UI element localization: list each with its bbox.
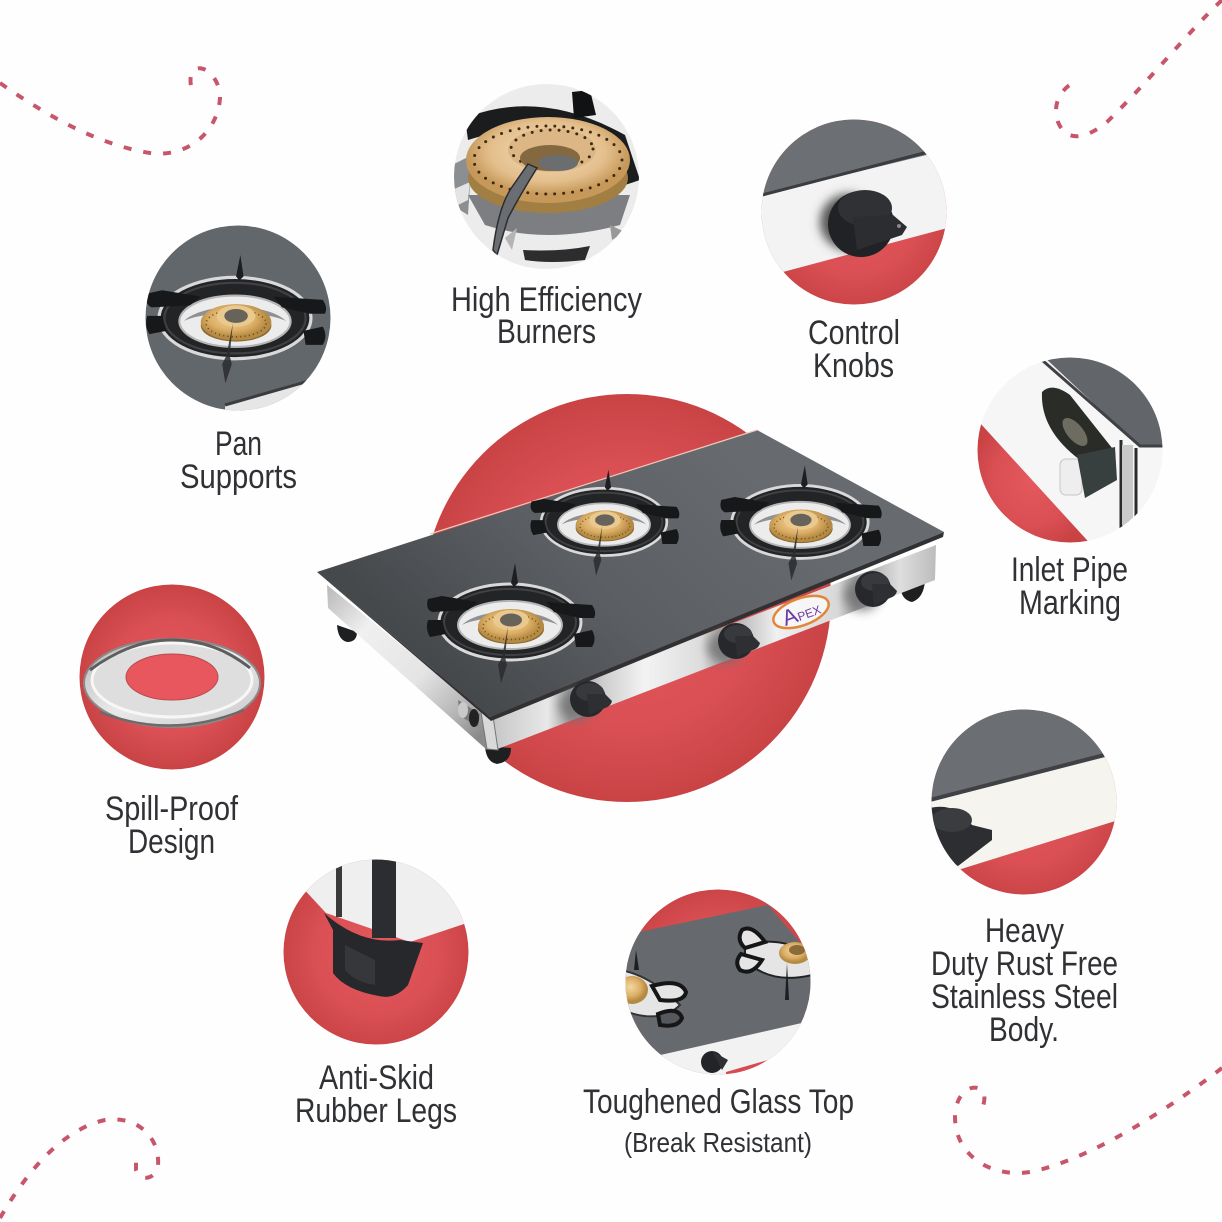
decorative dotted curve: bottom left <box>0 1119 158 1218</box>
stainless body: front face <box>490 545 936 750</box>
control knob: middle <box>707 623 760 663</box>
feature: heavy duty rust free stainless steel body <box>925 705 1125 1049</box>
steel body image circle <box>932 710 1116 894</box>
feature: anti-skid rubber legs <box>280 850 475 1130</box>
inlet pipe marking label <box>1011 551 1128 622</box>
high efficiency burners label: High Efficiency <box>451 281 642 319</box>
burner: front left <box>427 563 595 683</box>
brand logo: APEX <box>779 594 824 631</box>
control knob: back <box>844 571 897 611</box>
feature: high efficiency burners <box>450 80 645 351</box>
high efficiency burners label: Burners <box>497 313 596 351</box>
anti-skid rubber legs label: Anti-Skid <box>319 1059 434 1097</box>
stainless body: corner strip <box>481 712 498 750</box>
heavy duty stainless body label: Body. <box>989 1011 1059 1049</box>
decorative dotted curve: top left <box>0 68 220 154</box>
stainless body: side face <box>327 585 490 750</box>
pan supports label <box>180 425 297 496</box>
feature: inlet pipe marking <box>978 358 1162 621</box>
feature: spill-proof design <box>80 584 264 861</box>
product: three burner glass top gas stove <box>317 430 944 764</box>
toughened glass top label <box>583 1083 854 1158</box>
spill tray ring <box>84 639 260 727</box>
anti-skid rubber legs label <box>295 1059 457 1130</box>
heavy duty stainless body label: Stainless Steel <box>931 978 1118 1016</box>
inlet pipe marking label: Inlet Pipe <box>1011 551 1128 589</box>
control knobs label: Knobs <box>813 347 894 385</box>
high efficiency burners label <box>451 281 642 351</box>
spill-proof design label: Spill-Proof <box>105 790 238 828</box>
toughened glass top label: (Break Resistant) <box>624 1127 812 1158</box>
pan supports label: Supports <box>180 458 297 496</box>
burner: back right <box>720 465 882 581</box>
glass top <box>317 430 944 717</box>
heavy duty stainless body label <box>931 912 1118 1049</box>
burner: back middle <box>530 470 679 576</box>
glass top image circle <box>626 890 810 1074</box>
pan supports image circle <box>146 226 330 410</box>
anti-skid rubber legs label: Rubber Legs <box>295 1092 457 1130</box>
brand logo <box>769 589 833 635</box>
heavy duty stainless body label: Duty Rust Free <box>931 945 1118 983</box>
inlet pipe image circle <box>978 358 1162 542</box>
control knobs label: Control <box>808 314 900 352</box>
rubber leg image circle <box>284 860 468 1044</box>
control knobs label <box>808 314 900 385</box>
decorative dotted curve: top right <box>1056 0 1222 136</box>
spill tray image circle <box>80 584 264 770</box>
pan supports label: Pan <box>215 425 262 463</box>
feature: pan supports <box>140 220 340 496</box>
gas inlet <box>458 700 480 727</box>
stove feet <box>337 580 925 764</box>
feature: toughened glass top <box>583 885 854 1158</box>
central red circle backdrop <box>423 394 831 802</box>
decorative dotted curve: bottom right <box>955 1068 1222 1173</box>
control knob: front <box>559 681 612 721</box>
spill-proof design label <box>105 790 238 861</box>
control knob image circle <box>762 120 946 304</box>
toughened glass top label: Toughened Glass Top <box>583 1083 854 1121</box>
heavy duty stainless body label: Heavy <box>985 912 1064 950</box>
inlet pipe marking label: Marking <box>1019 584 1121 622</box>
spill-proof design label: Design <box>128 823 215 861</box>
feature: control knobs <box>762 120 946 378</box>
burner close-up image circle <box>450 80 645 275</box>
